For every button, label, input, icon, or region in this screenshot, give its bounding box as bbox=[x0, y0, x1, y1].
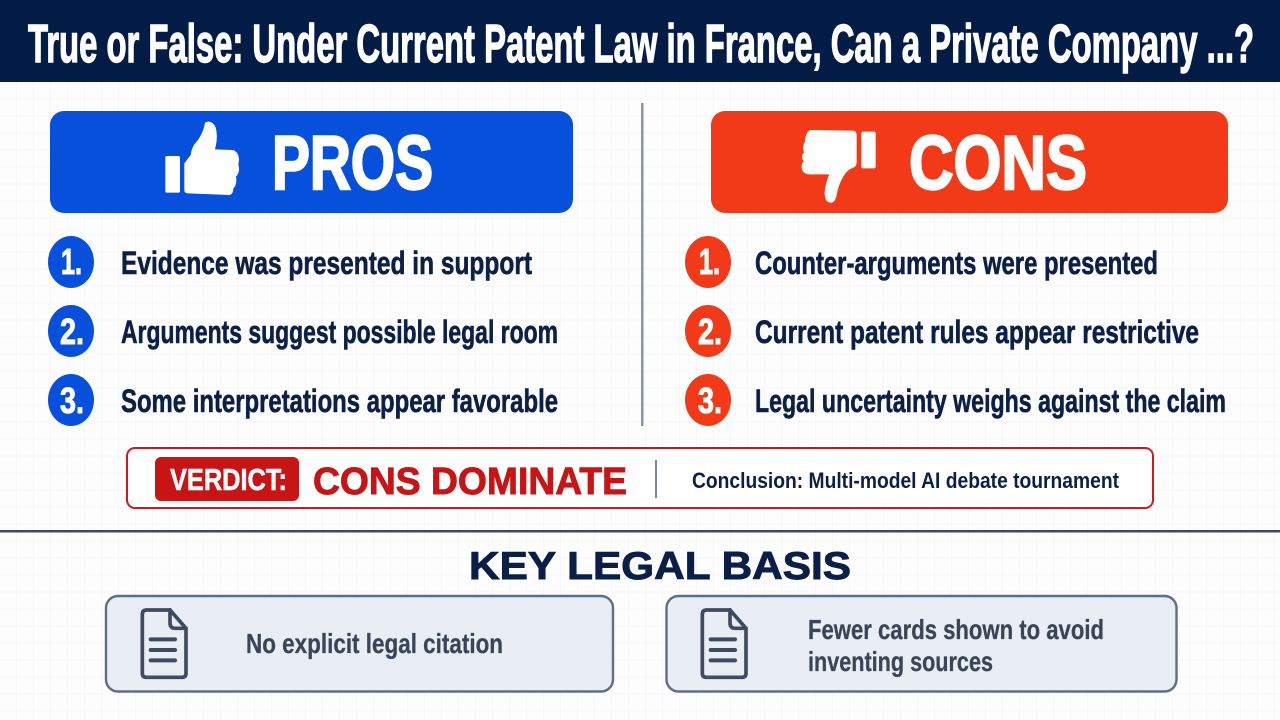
pro item 3: Some interpretations appear favorable bbox=[121, 383, 558, 419]
con item 1: Counter-arguments were presented bbox=[755, 245, 1158, 281]
con item 2 bbox=[685, 305, 1199, 357]
verdict badge: VERDICT: bbox=[170, 462, 287, 497]
pro item 1: 1. bbox=[61, 241, 82, 282]
card: fewer cards bbox=[666, 596, 1176, 692]
pro item 3 bbox=[48, 374, 558, 426]
con item 1 bbox=[685, 236, 1158, 288]
icon: thumbs down bbox=[802, 130, 876, 203]
cons heading: CONS bbox=[909, 121, 1087, 206]
pros heading: PROS bbox=[272, 121, 433, 206]
card text: No explicit legal citation bbox=[246, 628, 503, 659]
card: no citation bbox=[106, 596, 613, 692]
con item 3: 3. bbox=[698, 380, 722, 421]
panel: cons bbox=[685, 111, 1228, 426]
pro item 2 bbox=[48, 305, 558, 357]
icon: document bbox=[142, 610, 186, 677]
card text: inventing sources bbox=[808, 646, 993, 677]
panel: pros bbox=[48, 111, 573, 426]
con item 1: 1. bbox=[699, 241, 720, 282]
pro item 2: 2. bbox=[60, 311, 84, 352]
verdict bar bbox=[127, 448, 1153, 508]
con item 3 bbox=[685, 374, 1226, 426]
icon: document bbox=[702, 610, 746, 677]
section heading: key legal basis: KEY LEGAL BASIS bbox=[469, 545, 851, 588]
pros header bbox=[50, 111, 573, 213]
pro item 1 bbox=[48, 236, 532, 288]
icon: thumbs up bbox=[165, 122, 239, 195]
pro item 3: 3. bbox=[60, 380, 84, 421]
conclusion note: Conclusion: Multi-model AI debate tournament bbox=[692, 468, 1120, 493]
card text bbox=[808, 614, 1104, 677]
card text: Fewer cards shown to avoid bbox=[808, 614, 1104, 645]
title banner bbox=[0, 0, 1280, 82]
con item 2: 2. bbox=[698, 311, 722, 352]
verdict badge bbox=[155, 457, 299, 501]
cons header bbox=[711, 111, 1228, 213]
pro item 1: Evidence was presented in support bbox=[121, 245, 532, 281]
verdict result: CONS DOMINATE bbox=[313, 461, 627, 503]
pro item 2: Arguments suggest possible legal room bbox=[121, 314, 558, 350]
